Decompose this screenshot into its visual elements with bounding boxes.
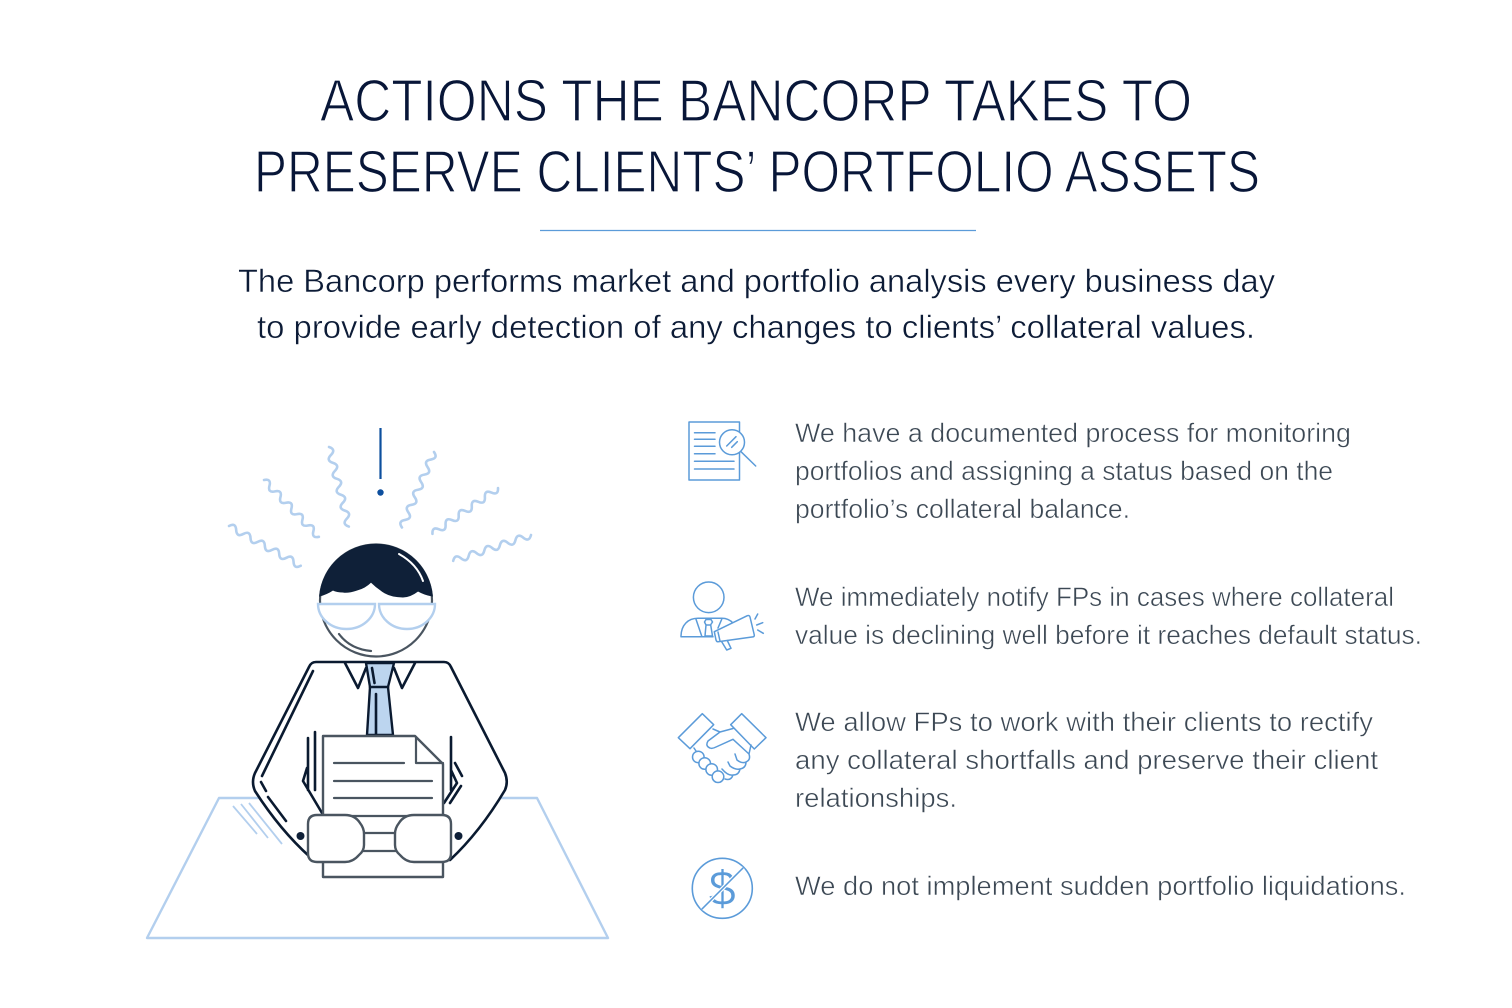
item 2: notify FPs: [681, 582, 1422, 650]
text: portfolio’s collateral balance.: [795, 494, 1130, 524]
tie and collar: [345, 663, 415, 735]
alarm squiggles: [227, 446, 532, 569]
text: [795, 582, 1422, 650]
item 3: work with clients: [678, 707, 1378, 813]
intro text: The Bancorp performs market and portfolio analysis every business day: [238, 263, 1275, 299]
body: [253, 662, 507, 860]
title: ACTIONS THE BANCORP TAKES TO: [320, 68, 1192, 134]
text: We allow FPs to work with their clients to rectify: [795, 707, 1373, 737]
icon: person with megaphone: [681, 582, 763, 650]
text: We do not implement sudden portfolio liquidations.: [795, 871, 1406, 901]
icon: handshake: [678, 714, 766, 782]
text: value is declining well before it reaches default status.: [795, 620, 1422, 650]
text: relationships.: [795, 783, 957, 813]
title: PRESERVE CLIENTS’ PORTFOLIO ASSETS: [254, 139, 1260, 205]
icon: crossed-out dollar: [692, 858, 752, 918]
text: [795, 707, 1378, 813]
document: [323, 736, 443, 877]
text: We immediately notify FPs in cases where collateral: [795, 582, 1394, 612]
text: [795, 418, 1351, 524]
exclamation mark: [377, 428, 384, 496]
intro text: to provide early detection of any changes to clients’ collateral values.: [257, 309, 1255, 345]
item 4: no sudden liquidations: [692, 858, 1406, 918]
text: We have a documented process for monitoring: [795, 418, 1351, 448]
head: [318, 544, 435, 656]
desk: [147, 798, 608, 938]
item 1: documented process: [689, 418, 1351, 524]
illustration: worried banker at desk: [147, 428, 608, 938]
text: any collateral shortfalls and preserve their client: [795, 745, 1378, 775]
icon: document with magnifier: [689, 422, 756, 480]
title: [254, 68, 1260, 205]
icon: crossed-out dollar: $: [709, 862, 736, 916]
text: portfolios and assigning a status based on the: [795, 456, 1333, 486]
hands: [308, 815, 451, 862]
intro text: [238, 263, 1275, 345]
